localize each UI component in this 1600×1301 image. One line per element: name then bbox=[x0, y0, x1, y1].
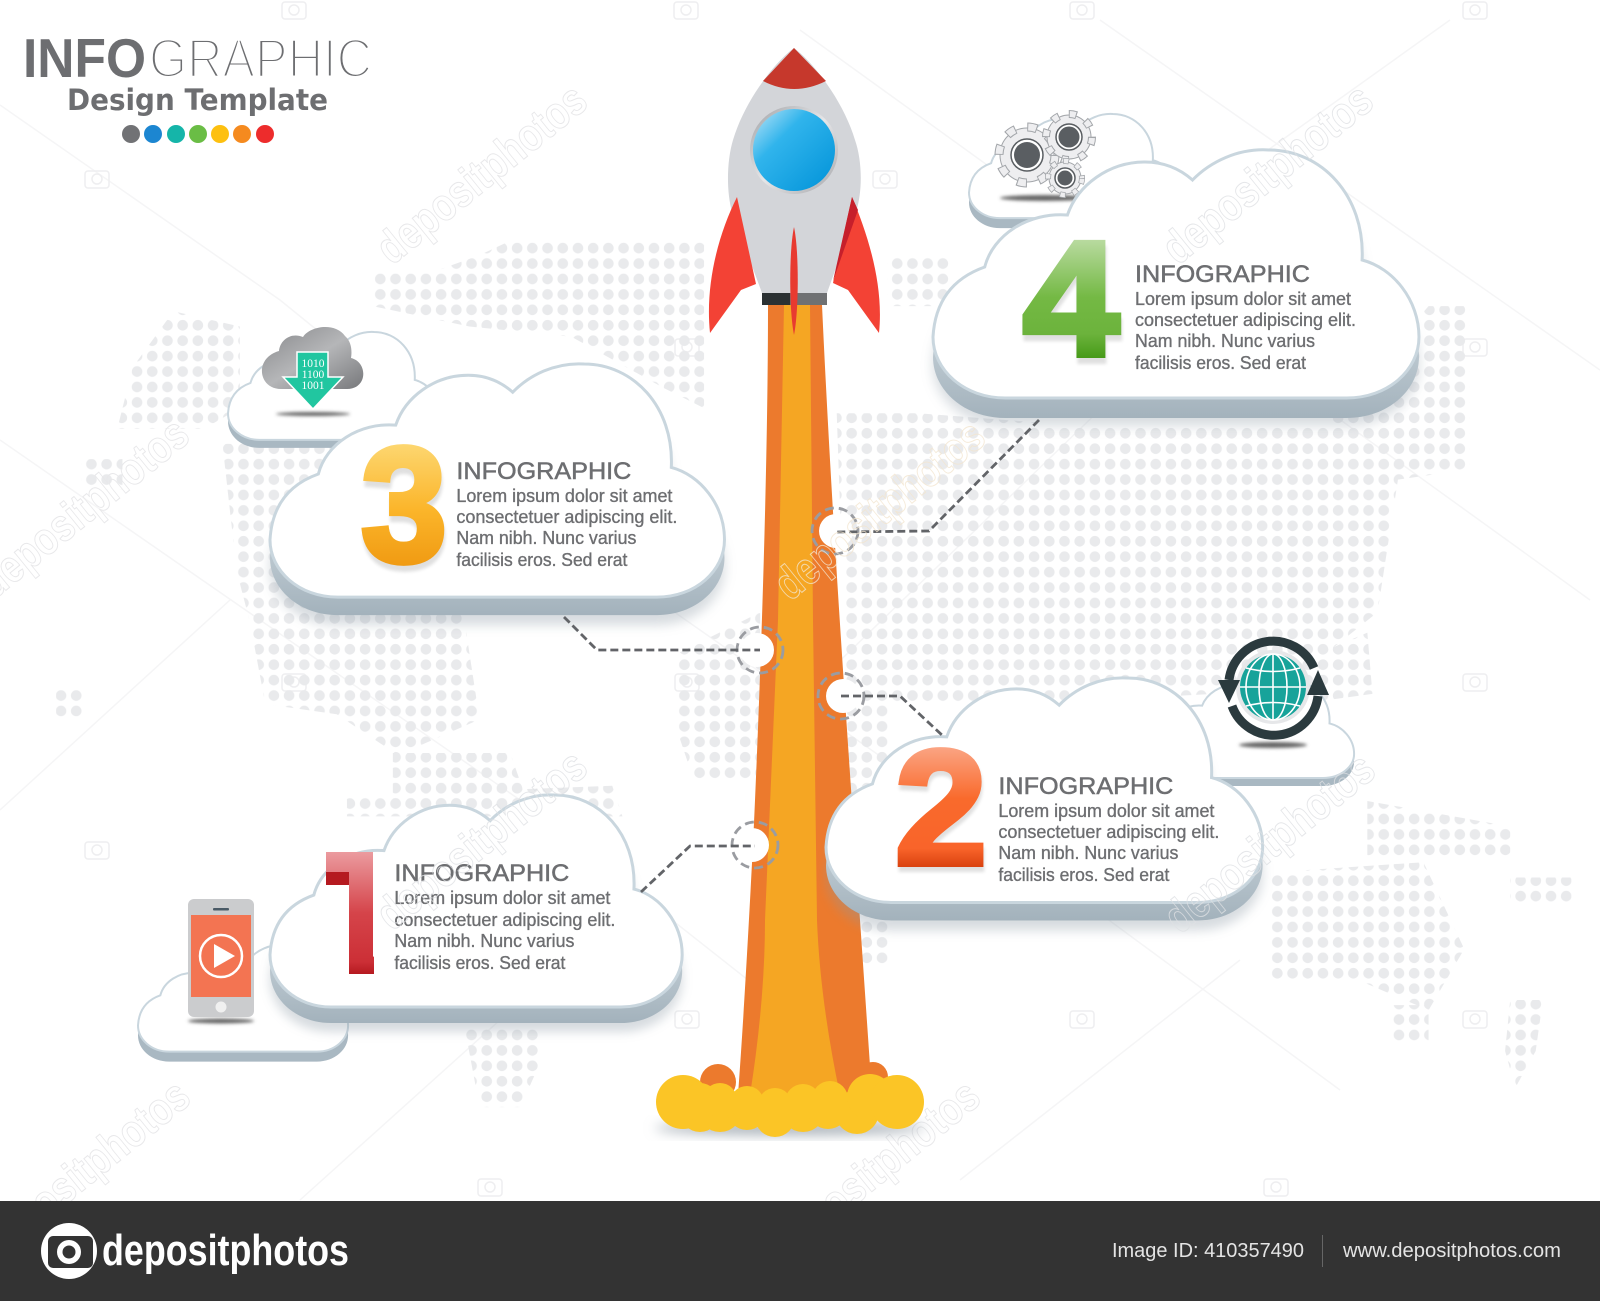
website: www.depositphotos.com bbox=[1342, 1240, 1561, 1262]
text: step 4: Nam nibh. Nunc varius bbox=[1135, 331, 1315, 351]
watermark text: depositphotos bbox=[366, 73, 596, 274]
logo bbox=[41, 1223, 349, 1279]
node bbox=[812, 508, 858, 554]
watermark over artwork: depositphotos bbox=[1152, 73, 1382, 274]
subtitle: Design Template bbox=[67, 83, 328, 117]
text: step 3: INFOGRAPHIC bbox=[456, 458, 631, 485]
arrowhead right bbox=[1307, 670, 1329, 695]
title: INFOGRAPHIC: INFO bbox=[23, 27, 146, 89]
connector: step 2 bbox=[818, 673, 943, 736]
dashed line bbox=[841, 696, 943, 736]
small cloud bbox=[969, 114, 1177, 228]
number 3: 3 bbox=[361, 413, 447, 596]
text: step 3: Lorem ipsum dolor sit amet bbox=[456, 486, 672, 506]
icon: cloud download: 1010 bbox=[302, 358, 325, 370]
centre fin bbox=[790, 227, 798, 335]
arrowhead left bbox=[1218, 680, 1240, 703]
text: step 4 bbox=[1135, 261, 1356, 373]
node bbox=[818, 673, 864, 719]
icon: globe with arrows bbox=[1218, 641, 1329, 748]
text: step 2: facilisis eros. Sed erat bbox=[998, 865, 1169, 885]
text: step 4: facilisis eros. Sed erat bbox=[1135, 353, 1306, 373]
title: INFOGRAPHIC: GRAPHIC bbox=[149, 27, 372, 89]
text: step 4: Lorem ipsum dolor sit amet bbox=[1135, 289, 1351, 309]
number 3: 3 bbox=[362, 419, 448, 602]
text: step 3: facilisis eros. Sed erat bbox=[456, 550, 627, 570]
orange puffs bbox=[700, 1062, 888, 1100]
footer bar bbox=[0, 1201, 1600, 1301]
title: INFOGRAPHIC bbox=[23, 27, 372, 89]
watermark over artwork: depositphotos bbox=[366, 739, 596, 940]
text: step 4: INFOGRAPHIC bbox=[1135, 261, 1310, 288]
panel: step 1 small cloud bbox=[138, 945, 348, 1062]
small cloud bbox=[228, 332, 440, 448]
number 1 bbox=[326, 852, 374, 974]
text: step 3: consectetuer adipiscing elit. bbox=[456, 507, 677, 527]
porthole bbox=[750, 106, 838, 194]
text: step 2: Lorem ipsum dolor sit amet bbox=[998, 801, 1214, 821]
image id: Image ID: 410357490 bbox=[1112, 1240, 1304, 1262]
number 2: 2 bbox=[895, 716, 987, 899]
panel: step 1 bbox=[188, 795, 682, 1032]
dotted world map bbox=[56, 241, 1571, 1107]
wordmark: depositphotos bbox=[102, 1226, 349, 1275]
icon: gears bbox=[999, 114, 1092, 201]
dashed line bbox=[641, 846, 755, 892]
number 4: 4 bbox=[1024, 213, 1120, 396]
panel: step 2 small cloud bbox=[1144, 680, 1354, 786]
text: step 1: consectetuer adipiscing elit. bbox=[394, 910, 615, 930]
cloud 4 bbox=[933, 150, 1419, 426]
text: step 2: Nam nibh. Nunc varius bbox=[998, 843, 1178, 863]
text: step 1: INFOGRAPHIC bbox=[394, 860, 569, 887]
cloud 2 bbox=[826, 678, 1263, 930]
right fin bbox=[833, 197, 880, 333]
outer flame bbox=[738, 305, 872, 1095]
dashed line bbox=[835, 420, 1039, 532]
node bbox=[737, 627, 783, 673]
smoke bbox=[656, 1074, 924, 1137]
text: step 3 bbox=[456, 458, 677, 570]
text: step 2 bbox=[998, 773, 1219, 885]
connector: step 4 bbox=[812, 420, 1039, 554]
cloud 1 bbox=[270, 795, 682, 1032]
number 1: 1 bbox=[303, 821, 398, 1011]
icon: camera badge bbox=[41, 1223, 97, 1279]
icon: cloud download: 1100 bbox=[302, 369, 325, 381]
node bbox=[732, 822, 778, 868]
number 2: 2 bbox=[896, 721, 988, 904]
rocket exhaust flame bbox=[655, 305, 925, 1137]
colour dots bbox=[122, 125, 274, 143]
watermark over artwork bbox=[366, 73, 1384, 943]
ground shadow bbox=[655, 1121, 925, 1135]
watermark text: depositphotos bbox=[759, 1069, 989, 1270]
watermark text bbox=[0, 73, 989, 1270]
panel: step 3 bbox=[270, 364, 724, 625]
right fin shadow bbox=[833, 197, 858, 281]
connector: step 3 bbox=[564, 617, 783, 673]
cloud 3 bbox=[270, 364, 724, 625]
engine band bbox=[762, 293, 827, 305]
inner flame bbox=[750, 305, 840, 1095]
panel: step 4 bbox=[933, 150, 1419, 426]
watermark over artwork: depositphotos bbox=[1154, 742, 1384, 943]
text: step 2: INFOGRAPHIC bbox=[998, 773, 1173, 800]
rocket bbox=[709, 48, 880, 335]
left fin bbox=[709, 197, 756, 333]
number 4: 4 bbox=[1023, 207, 1119, 390]
nose cone bbox=[763, 48, 826, 89]
panel: step 4 small cloud with gears bbox=[969, 114, 1177, 228]
text: step 1: facilisis eros. Sed erat bbox=[394, 953, 565, 973]
dashed line bbox=[564, 617, 760, 650]
title bbox=[23, 27, 372, 143]
panel: step 2 bbox=[826, 641, 1329, 930]
watermark over artwork: depositphotos bbox=[764, 409, 994, 610]
icon: cloud download: 1001 bbox=[302, 380, 325, 392]
icon: smartphone play bbox=[188, 899, 254, 1024]
text: step 4: consectetuer adipiscing elit. bbox=[1135, 310, 1356, 330]
text: step 2: consectetuer adipiscing elit. bbox=[998, 822, 1219, 842]
text: step 1: Lorem ipsum dolor sit amet bbox=[394, 888, 610, 908]
icon: cloud download bbox=[262, 327, 363, 416]
text: step 1 bbox=[394, 860, 615, 973]
panel: step 3 small cloud with download icon bbox=[228, 327, 440, 448]
text: step 1: Nam nibh. Nunc varius bbox=[394, 931, 574, 951]
text: step 3: Nam nibh. Nunc varius bbox=[456, 528, 636, 548]
connector: step 1 bbox=[641, 822, 778, 892]
rocket body bbox=[728, 48, 861, 293]
